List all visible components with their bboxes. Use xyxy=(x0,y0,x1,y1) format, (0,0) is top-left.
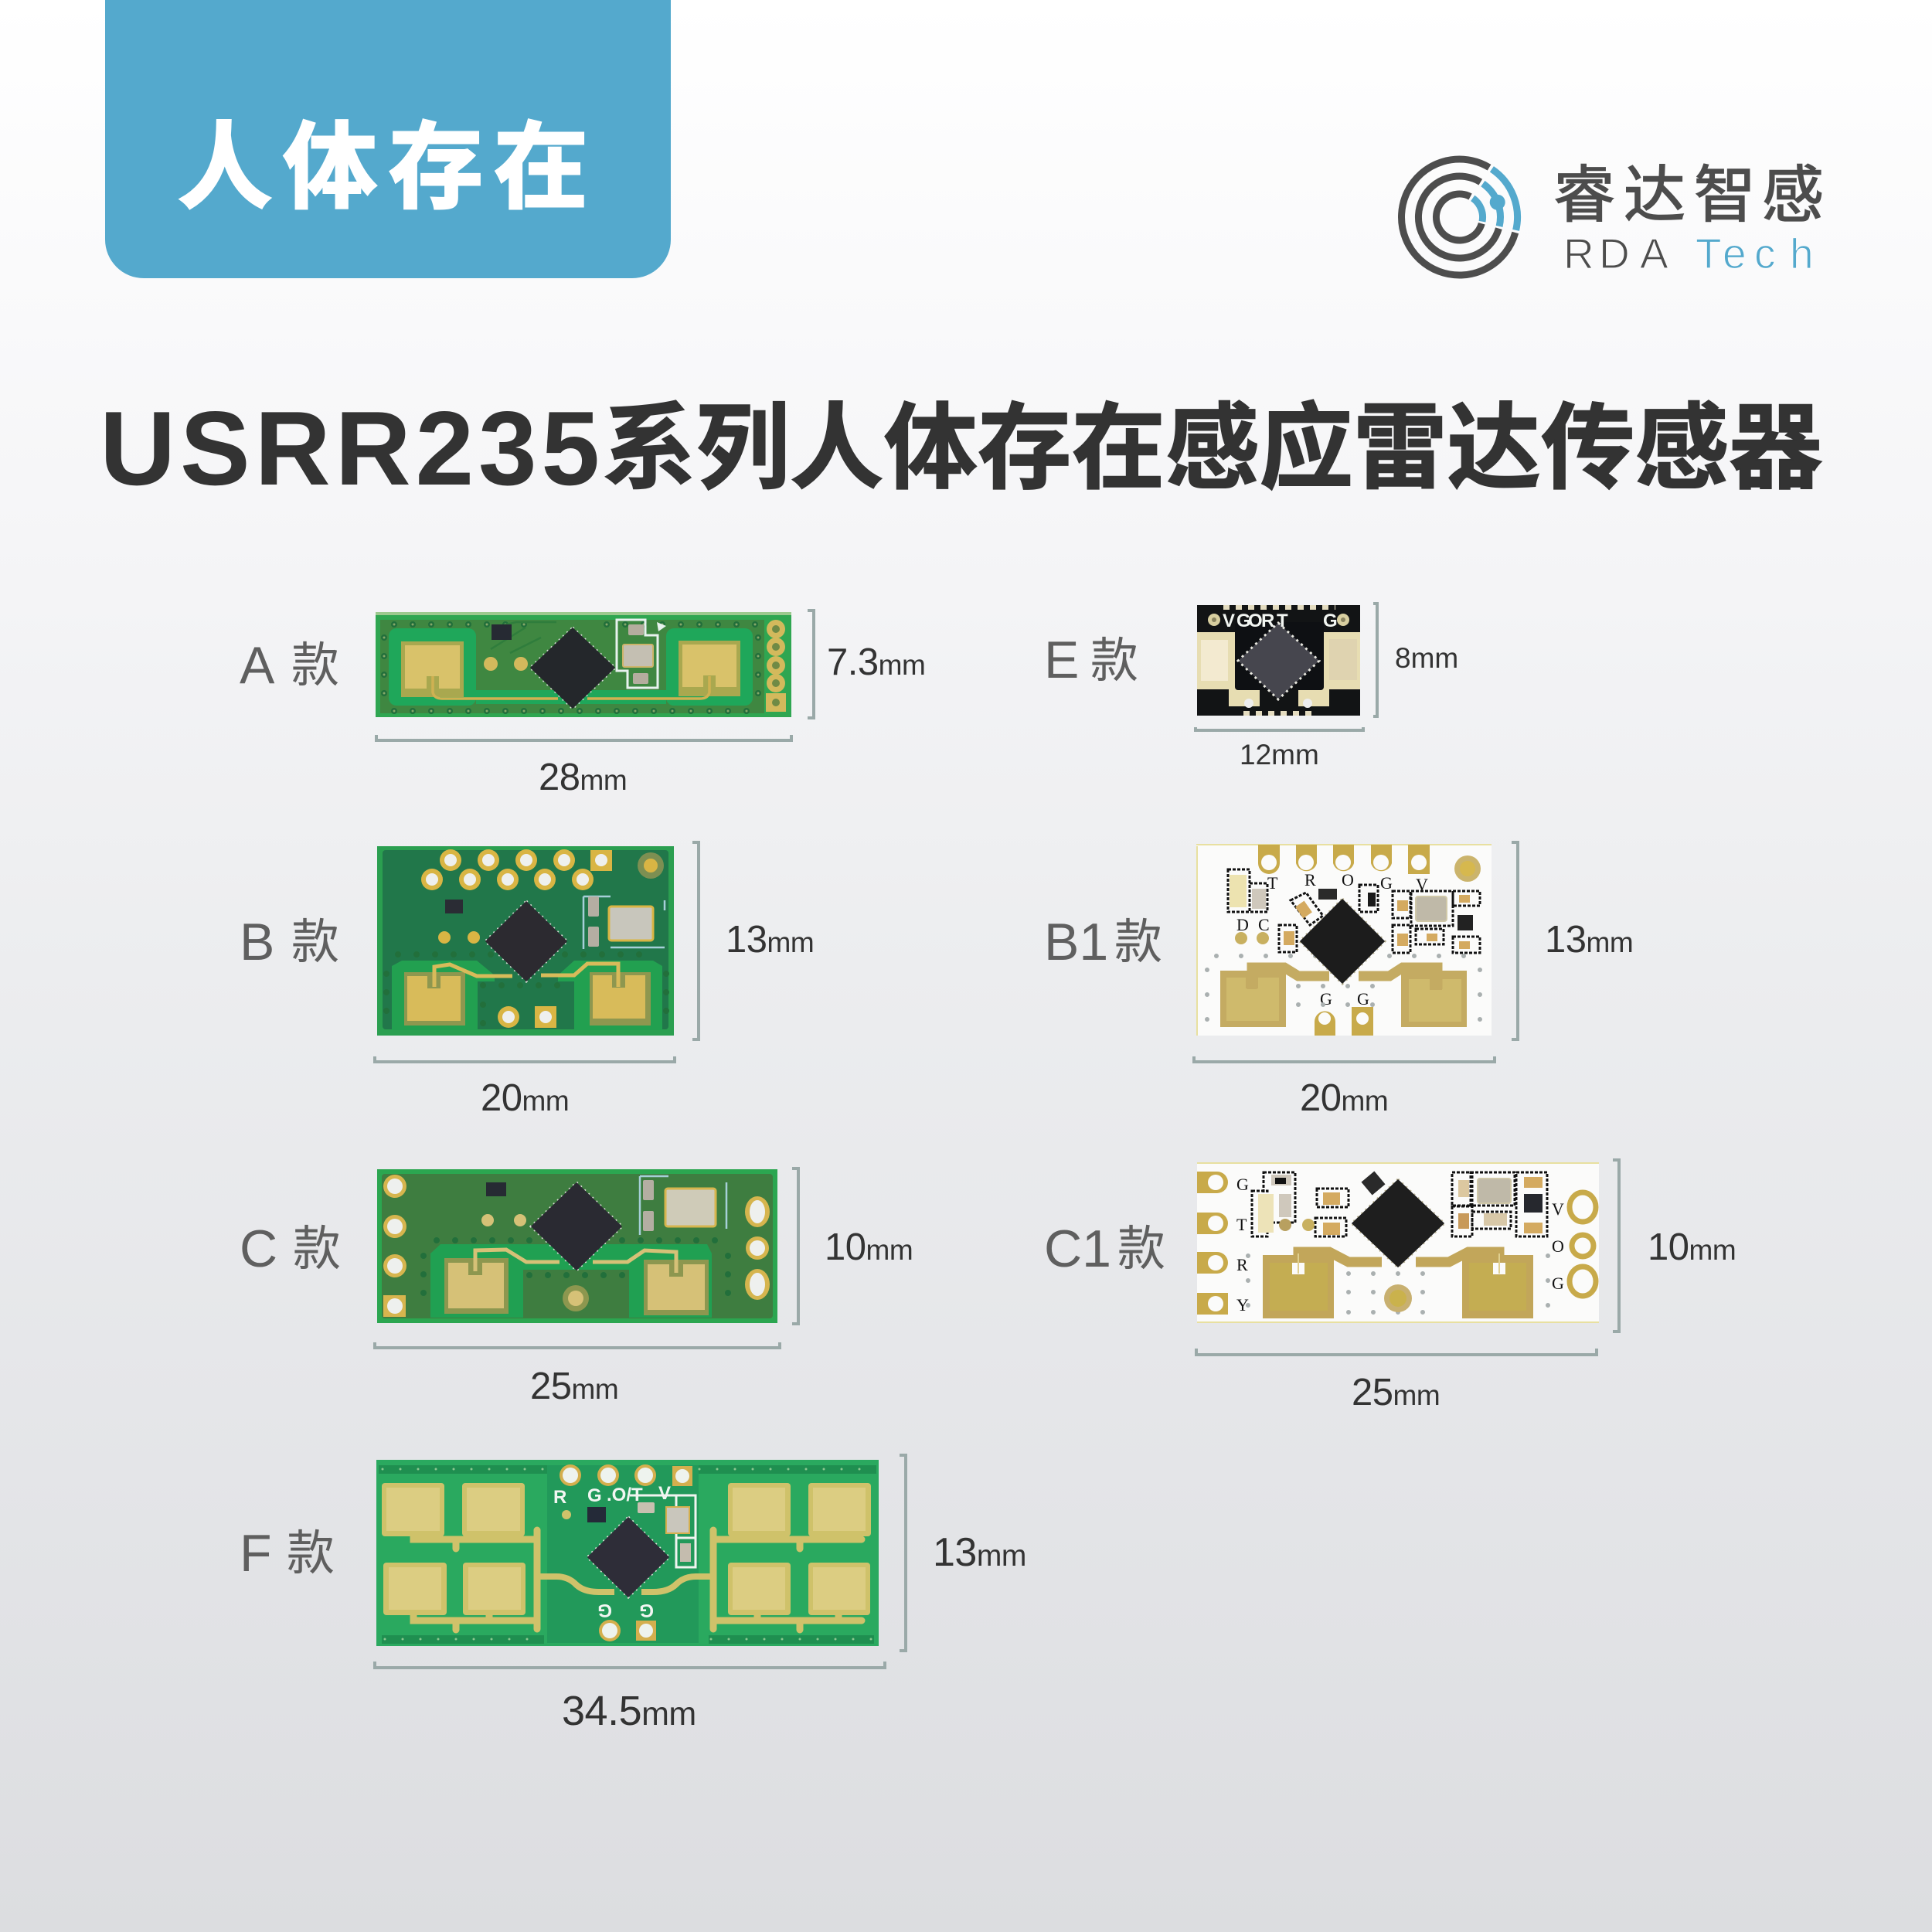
board: F: G xyxy=(639,1600,654,1621)
icon: concentric radar rings xyxy=(1402,159,1518,275)
board: F: .O/T xyxy=(607,1485,643,1505)
label: C款 xyxy=(240,1209,341,1279)
label: B款 xyxy=(240,903,339,972)
label: F款: F xyxy=(240,1524,272,1583)
board: B1: C xyxy=(1258,915,1270,934)
board: C xyxy=(377,1169,777,1323)
dimension: 10mm: 10mm xyxy=(825,1226,913,1268)
board: C1 xyxy=(1197,1163,1599,1322)
board: E xyxy=(1197,605,1360,716)
board: F: G xyxy=(587,1485,602,1506)
logo: RDA Tech xyxy=(1402,145,1824,277)
board: B xyxy=(377,846,674,1036)
dimension bracket: B xyxy=(375,842,699,1062)
panel: E款 xyxy=(1044,604,1458,770)
board: F: R xyxy=(553,1487,566,1508)
board: C1: O xyxy=(1552,1236,1564,1256)
board: B1: G xyxy=(1320,989,1332,1009)
dimension bracket: C xyxy=(375,1168,798,1348)
label: C1款 xyxy=(1044,1209,1165,1279)
panel: B1款 xyxy=(1044,842,1633,1119)
label: A款: A xyxy=(240,636,275,695)
board: B1: D xyxy=(1236,915,1249,934)
board: B1: R xyxy=(1304,870,1316,889)
label: A款 xyxy=(240,626,339,696)
label: C款: 款 xyxy=(293,1209,341,1279)
panel: C款 xyxy=(240,1168,913,1407)
board: F xyxy=(376,1460,879,1646)
label: E款: 款 xyxy=(1090,621,1138,691)
board: B1 xyxy=(1196,845,1492,1036)
label: B1款 xyxy=(1044,903,1162,972)
dimension: 34.5mm: 34.5mm xyxy=(562,1688,696,1734)
panel: A款 xyxy=(240,611,925,798)
dimension bracket: B1 xyxy=(1194,842,1518,1062)
dimension: 8mm: 8mm xyxy=(1395,642,1458,674)
label: B款: B xyxy=(240,913,274,971)
label: E款 xyxy=(1044,621,1138,691)
board: E: VGORTG xyxy=(1223,611,1338,631)
board: C1: R xyxy=(1236,1255,1248,1274)
dimension: 25mm: 25mm xyxy=(530,1366,618,1407)
dimension bracket: E xyxy=(1196,604,1377,730)
label: E款: E xyxy=(1044,631,1079,689)
title: USRR235 xyxy=(100,389,604,507)
dimension bracket: F xyxy=(375,1455,906,1668)
banner: category tag xyxy=(105,0,671,278)
board: C1: V xyxy=(1552,1199,1564,1219)
dimension: 20mm: 20mm xyxy=(1300,1077,1388,1119)
dimension: 13mm: 13mm xyxy=(933,1530,1026,1575)
dimension bracket: A xyxy=(376,611,814,740)
dimension: 12mm: 12mm xyxy=(1240,739,1319,770)
dimension: 10mm: 10mm xyxy=(1648,1226,1736,1268)
banner: category tag: 人体存在 xyxy=(178,91,588,228)
board: C1: G xyxy=(1552,1274,1564,1293)
dimension: 13mm: 13mm xyxy=(726,919,814,961)
board: B1: O xyxy=(1342,870,1354,889)
label: B1款: B1 xyxy=(1044,913,1108,971)
board: C1: G xyxy=(1236,1175,1249,1194)
dimension: 28mm: 28mm xyxy=(539,757,627,798)
logo: RDA Tech: RDA xyxy=(1563,230,1668,277)
label: F款 xyxy=(240,1514,335,1583)
panel: B款 xyxy=(240,842,814,1119)
logo: RDA Tech: Tech xyxy=(1696,230,1814,277)
label: C1款: 款 xyxy=(1117,1209,1165,1279)
dimension bracket: C1 xyxy=(1196,1160,1619,1355)
label: B1款: 款 xyxy=(1114,903,1162,972)
label: C1款: C1 xyxy=(1044,1219,1111,1278)
board: B1: G xyxy=(1380,873,1393,893)
logo: RDA Tech: 睿达智感 xyxy=(1553,145,1824,235)
dimension: 13mm: 13mm xyxy=(1545,919,1633,961)
board: C1: Y xyxy=(1236,1295,1249,1315)
dimension: 7.3mm: 7.3mm xyxy=(827,641,925,683)
dimension: 25mm: 25mm xyxy=(1352,1372,1440,1413)
board: F: G xyxy=(597,1600,612,1621)
board: A xyxy=(376,612,791,717)
board: C1: T xyxy=(1236,1215,1247,1234)
panel: C1款 xyxy=(1044,1160,1736,1413)
panel: F款 xyxy=(240,1455,1026,1734)
dimension: 20mm: 20mm xyxy=(481,1077,569,1119)
label: B款: 款 xyxy=(291,903,339,972)
board: B1: T xyxy=(1267,873,1278,893)
board: B1: V xyxy=(1416,875,1428,894)
label: C款: C xyxy=(240,1219,277,1278)
title: 系列人体存在感应雷达传感器 xyxy=(602,372,1823,508)
board: B1: G xyxy=(1357,989,1369,1009)
label: A款: 款 xyxy=(291,626,339,696)
board: F: V xyxy=(658,1483,671,1504)
label: F款: 款 xyxy=(287,1514,335,1583)
